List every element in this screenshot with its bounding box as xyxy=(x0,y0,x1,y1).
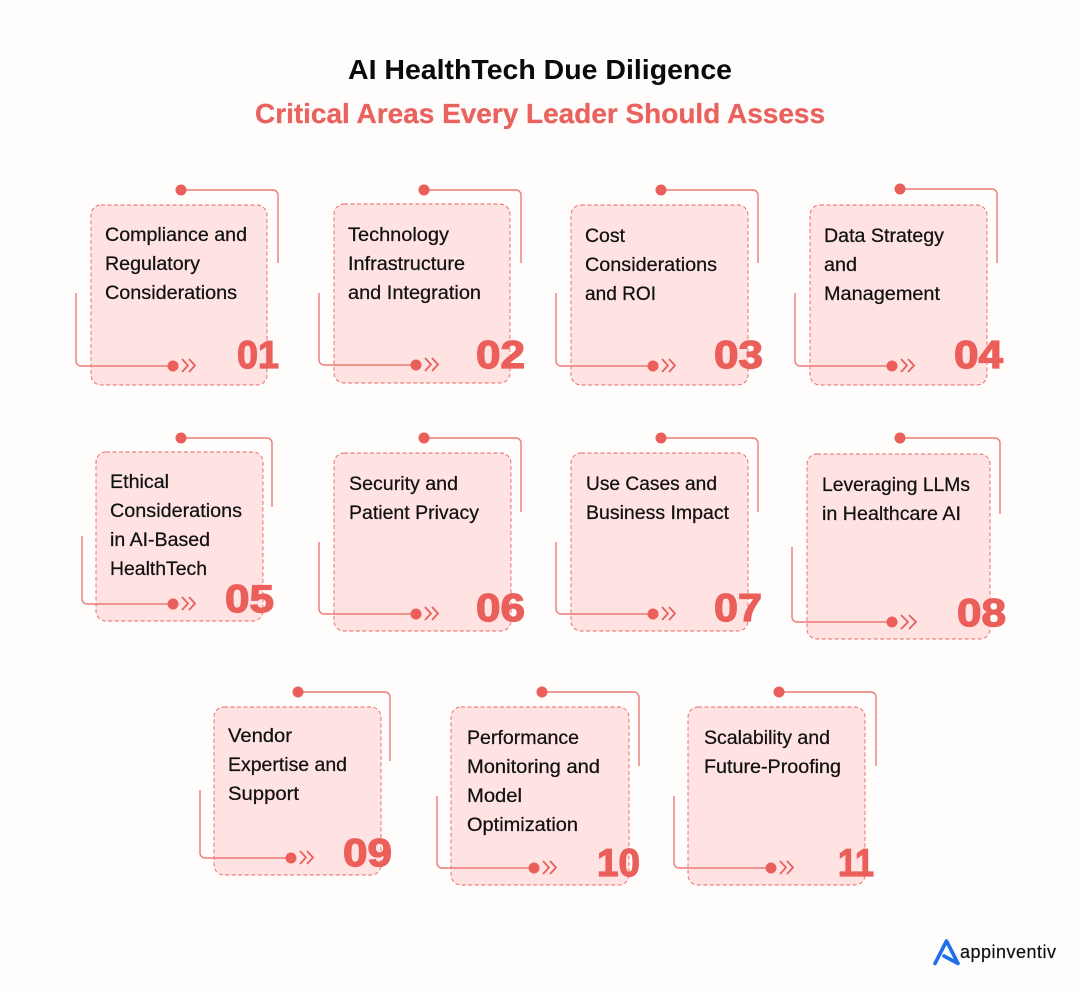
number 04: 04 xyxy=(954,334,1003,377)
number 08: 08 xyxy=(957,592,1006,635)
panel: card 10 performance xyxy=(437,686,640,885)
card text: Ethical xyxy=(110,472,169,493)
card text: Patient Privacy xyxy=(349,503,479,524)
card text: Vendor xyxy=(228,726,293,747)
number 09: 09 xyxy=(343,832,392,875)
icon: logo mark xyxy=(935,941,958,964)
number 06: 06 xyxy=(476,587,525,630)
card text xyxy=(824,226,945,305)
panel: card 09 vendor xyxy=(200,686,392,875)
card text: Considerations xyxy=(105,283,237,304)
card text: and Integration xyxy=(348,283,481,304)
card text: Optimization xyxy=(467,815,578,836)
card text: in Healthcare AI xyxy=(822,504,961,525)
card text: Expertise and xyxy=(228,755,347,776)
card text xyxy=(704,728,841,778)
number 11: 11 xyxy=(838,842,874,885)
panel: card 02 technology xyxy=(319,184,525,383)
panel: card 03 cost xyxy=(556,184,763,385)
card text: Cost xyxy=(585,226,626,247)
card text: Security and xyxy=(349,474,458,495)
card text: Data Strategy xyxy=(824,226,945,247)
card text xyxy=(822,475,970,525)
panel: card 11 scalability xyxy=(674,686,876,885)
card text: Scalability and xyxy=(704,728,830,749)
heading: subtitle: Critical Areas Every Leader Should Assess xyxy=(255,98,825,129)
card text: Compliance and xyxy=(105,225,247,246)
number 05: 05 xyxy=(225,578,274,621)
panel: card 06 security xyxy=(319,432,525,631)
heading: main title: AI HealthTech Due Diligence xyxy=(348,54,732,85)
card text: Leveraging LLMs xyxy=(822,475,970,496)
number 07: 07 xyxy=(714,587,762,630)
logo: appinventiv xyxy=(935,941,1056,964)
panel: card 04 data strategy xyxy=(795,184,1003,385)
card text xyxy=(585,226,717,305)
logo wordmark: appinventiv xyxy=(960,942,1056,962)
card text: Technology xyxy=(348,225,450,246)
number 02: 02 xyxy=(476,334,525,377)
card text: HealthTech xyxy=(110,559,207,580)
card text xyxy=(467,728,600,836)
card text xyxy=(349,474,479,524)
card text: Infrastructure xyxy=(348,254,465,275)
panel: card 08 LLMs xyxy=(792,432,1006,639)
card text xyxy=(110,472,242,580)
card text: Considerations xyxy=(585,255,717,276)
panel: card 01 compliance xyxy=(76,184,279,385)
card text: Considerations xyxy=(110,501,242,522)
card text: Support xyxy=(228,784,300,805)
card text xyxy=(348,225,481,304)
card text: Model xyxy=(467,786,522,807)
panel: card 07 use cases xyxy=(556,432,762,631)
card text: Performance xyxy=(467,728,579,749)
card text xyxy=(228,726,347,805)
card text: Use Cases and xyxy=(586,474,717,495)
number 03: 03 xyxy=(714,334,763,377)
card text: in AI-Based xyxy=(110,530,210,551)
card text: and xyxy=(824,255,857,276)
number 10: 10 xyxy=(597,842,640,885)
card text: Business Impact xyxy=(586,503,730,524)
card text: Future-Proofing xyxy=(704,757,841,778)
number 01: 01 xyxy=(237,334,279,377)
card text: Monitoring and xyxy=(467,757,600,778)
card text: and ROI xyxy=(585,284,656,305)
card text: Regulatory xyxy=(105,254,201,275)
panel: card 05 ethical xyxy=(82,432,274,621)
card text: Management xyxy=(824,284,941,305)
card text xyxy=(586,474,730,524)
card text xyxy=(105,225,247,304)
title xyxy=(255,54,825,129)
